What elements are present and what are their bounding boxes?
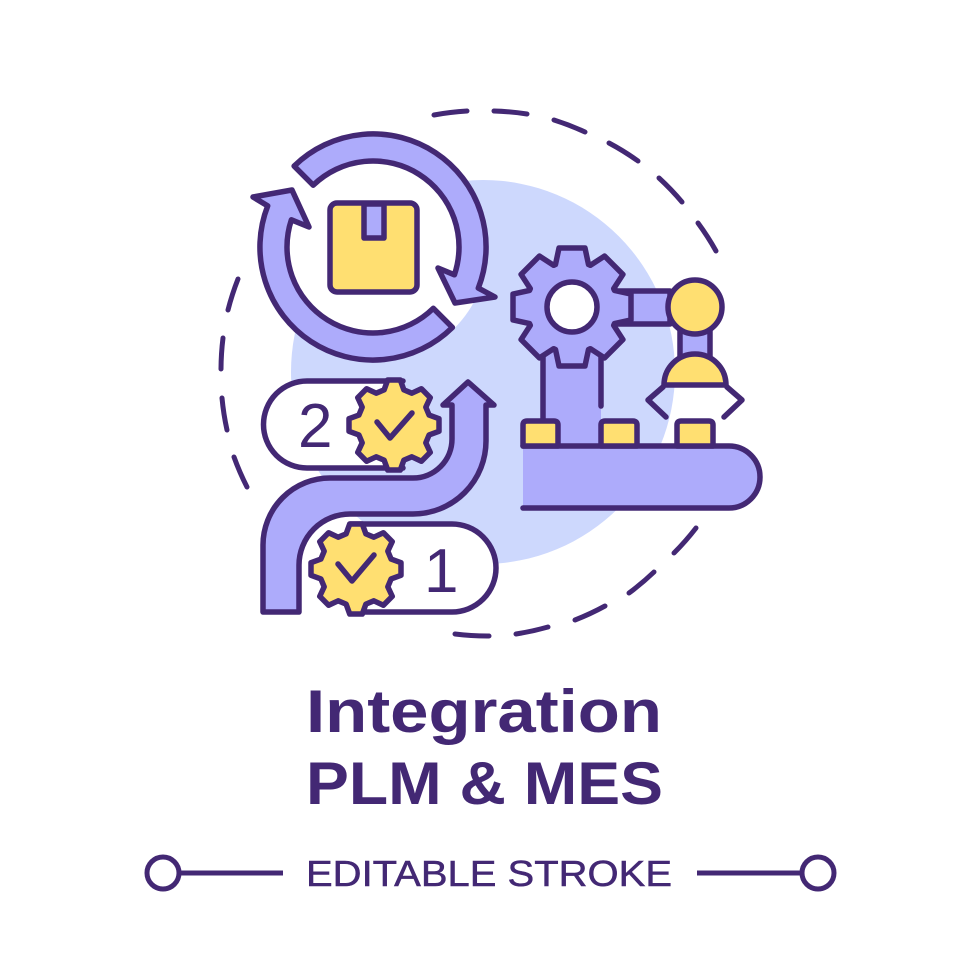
- S-shaped arrow: [263, 382, 494, 612]
- gripper claws: [648, 387, 742, 417]
- box on conveyor 1: [523, 421, 558, 446]
- conveyor belt: [523, 446, 760, 508]
- step 2 pill: [264, 381, 403, 468]
- gear with check: step 2: [349, 380, 439, 470]
- step 1 pill: [300, 524, 496, 612]
- pillar: [543, 350, 601, 448]
- neck: [680, 330, 710, 358]
- arm joint: [668, 280, 722, 334]
- cycle arrow: bottom left: [253, 190, 452, 360]
- title: PLM & MES: [306, 750, 663, 817]
- number 1: 1: [424, 537, 458, 606]
- dashed ring: [221, 111, 716, 636]
- background circle: [291, 180, 675, 564]
- box on conveyor 3: [677, 421, 713, 446]
- title: [306, 678, 663, 817]
- cycle arrow: top right: [294, 134, 495, 303]
- drive gear: [513, 248, 631, 366]
- icon: box: [330, 203, 417, 292]
- icon: robotic arm on conveyor: [513, 248, 760, 508]
- gear with check: step 1: [311, 524, 401, 614]
- editable stroke caption: EDITABLE STROKE: [306, 853, 672, 894]
- box on conveyor 2: [601, 421, 637, 446]
- gripper head: [664, 354, 726, 385]
- number 2: 2: [298, 392, 332, 461]
- horizontal arm: [615, 291, 670, 324]
- icon: product cycle with box: [253, 132, 495, 362]
- icon: process steps: [263, 380, 496, 614]
- editable stroke caption: [147, 853, 834, 894]
- title: Integration: [306, 678, 662, 745]
